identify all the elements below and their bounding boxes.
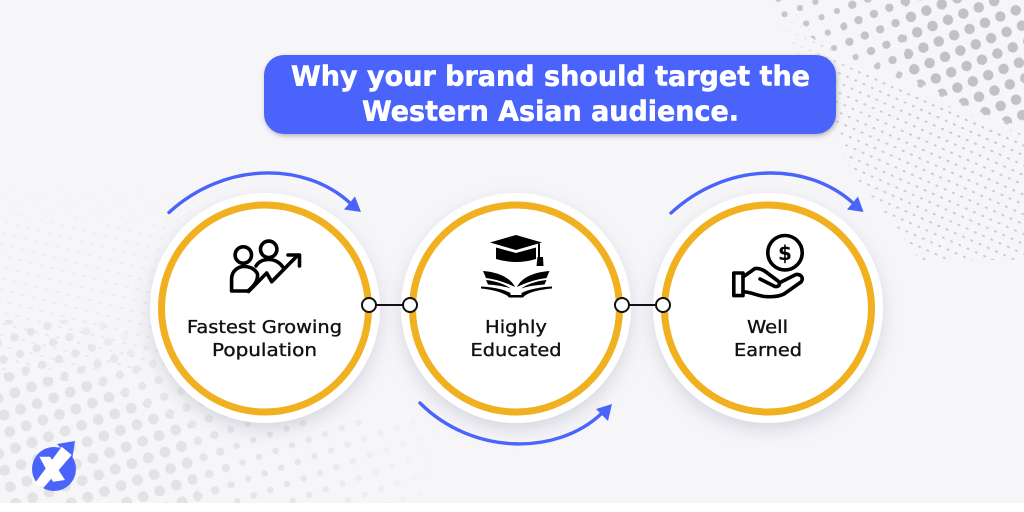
connector: second to third circle <box>615 298 670 312</box>
icon: hand holding coin: $ <box>778 241 792 265</box>
icon: brand logo <box>32 441 76 491</box>
label: Well <box>747 317 788 338</box>
panel: fastest growing population: Population <box>212 340 317 361</box>
panel: fastest growing population <box>150 193 380 423</box>
arrow: bottom of second circle <box>420 403 612 444</box>
panel: highly educated: Educated <box>470 340 562 361</box>
arrow: top of third circle <box>671 173 864 213</box>
icon: hand holding coin <box>734 236 802 297</box>
label: Fastest Growing <box>187 317 342 338</box>
icon: people with growth arrow <box>232 241 300 292</box>
panel: well earned <box>653 193 883 423</box>
panel: well earned: Earned <box>734 340 802 361</box>
icon: graduation cap and open book <box>481 235 552 298</box>
label: Highly <box>485 317 547 338</box>
title banner <box>264 55 836 134</box>
title banner: Western Asian audience. <box>362 96 739 128</box>
arrow: top of first circle <box>169 173 361 212</box>
connector: first to second circle <box>362 298 417 312</box>
panel: highly educated <box>401 193 631 423</box>
title banner: Why your brand should target the <box>291 60 810 92</box>
